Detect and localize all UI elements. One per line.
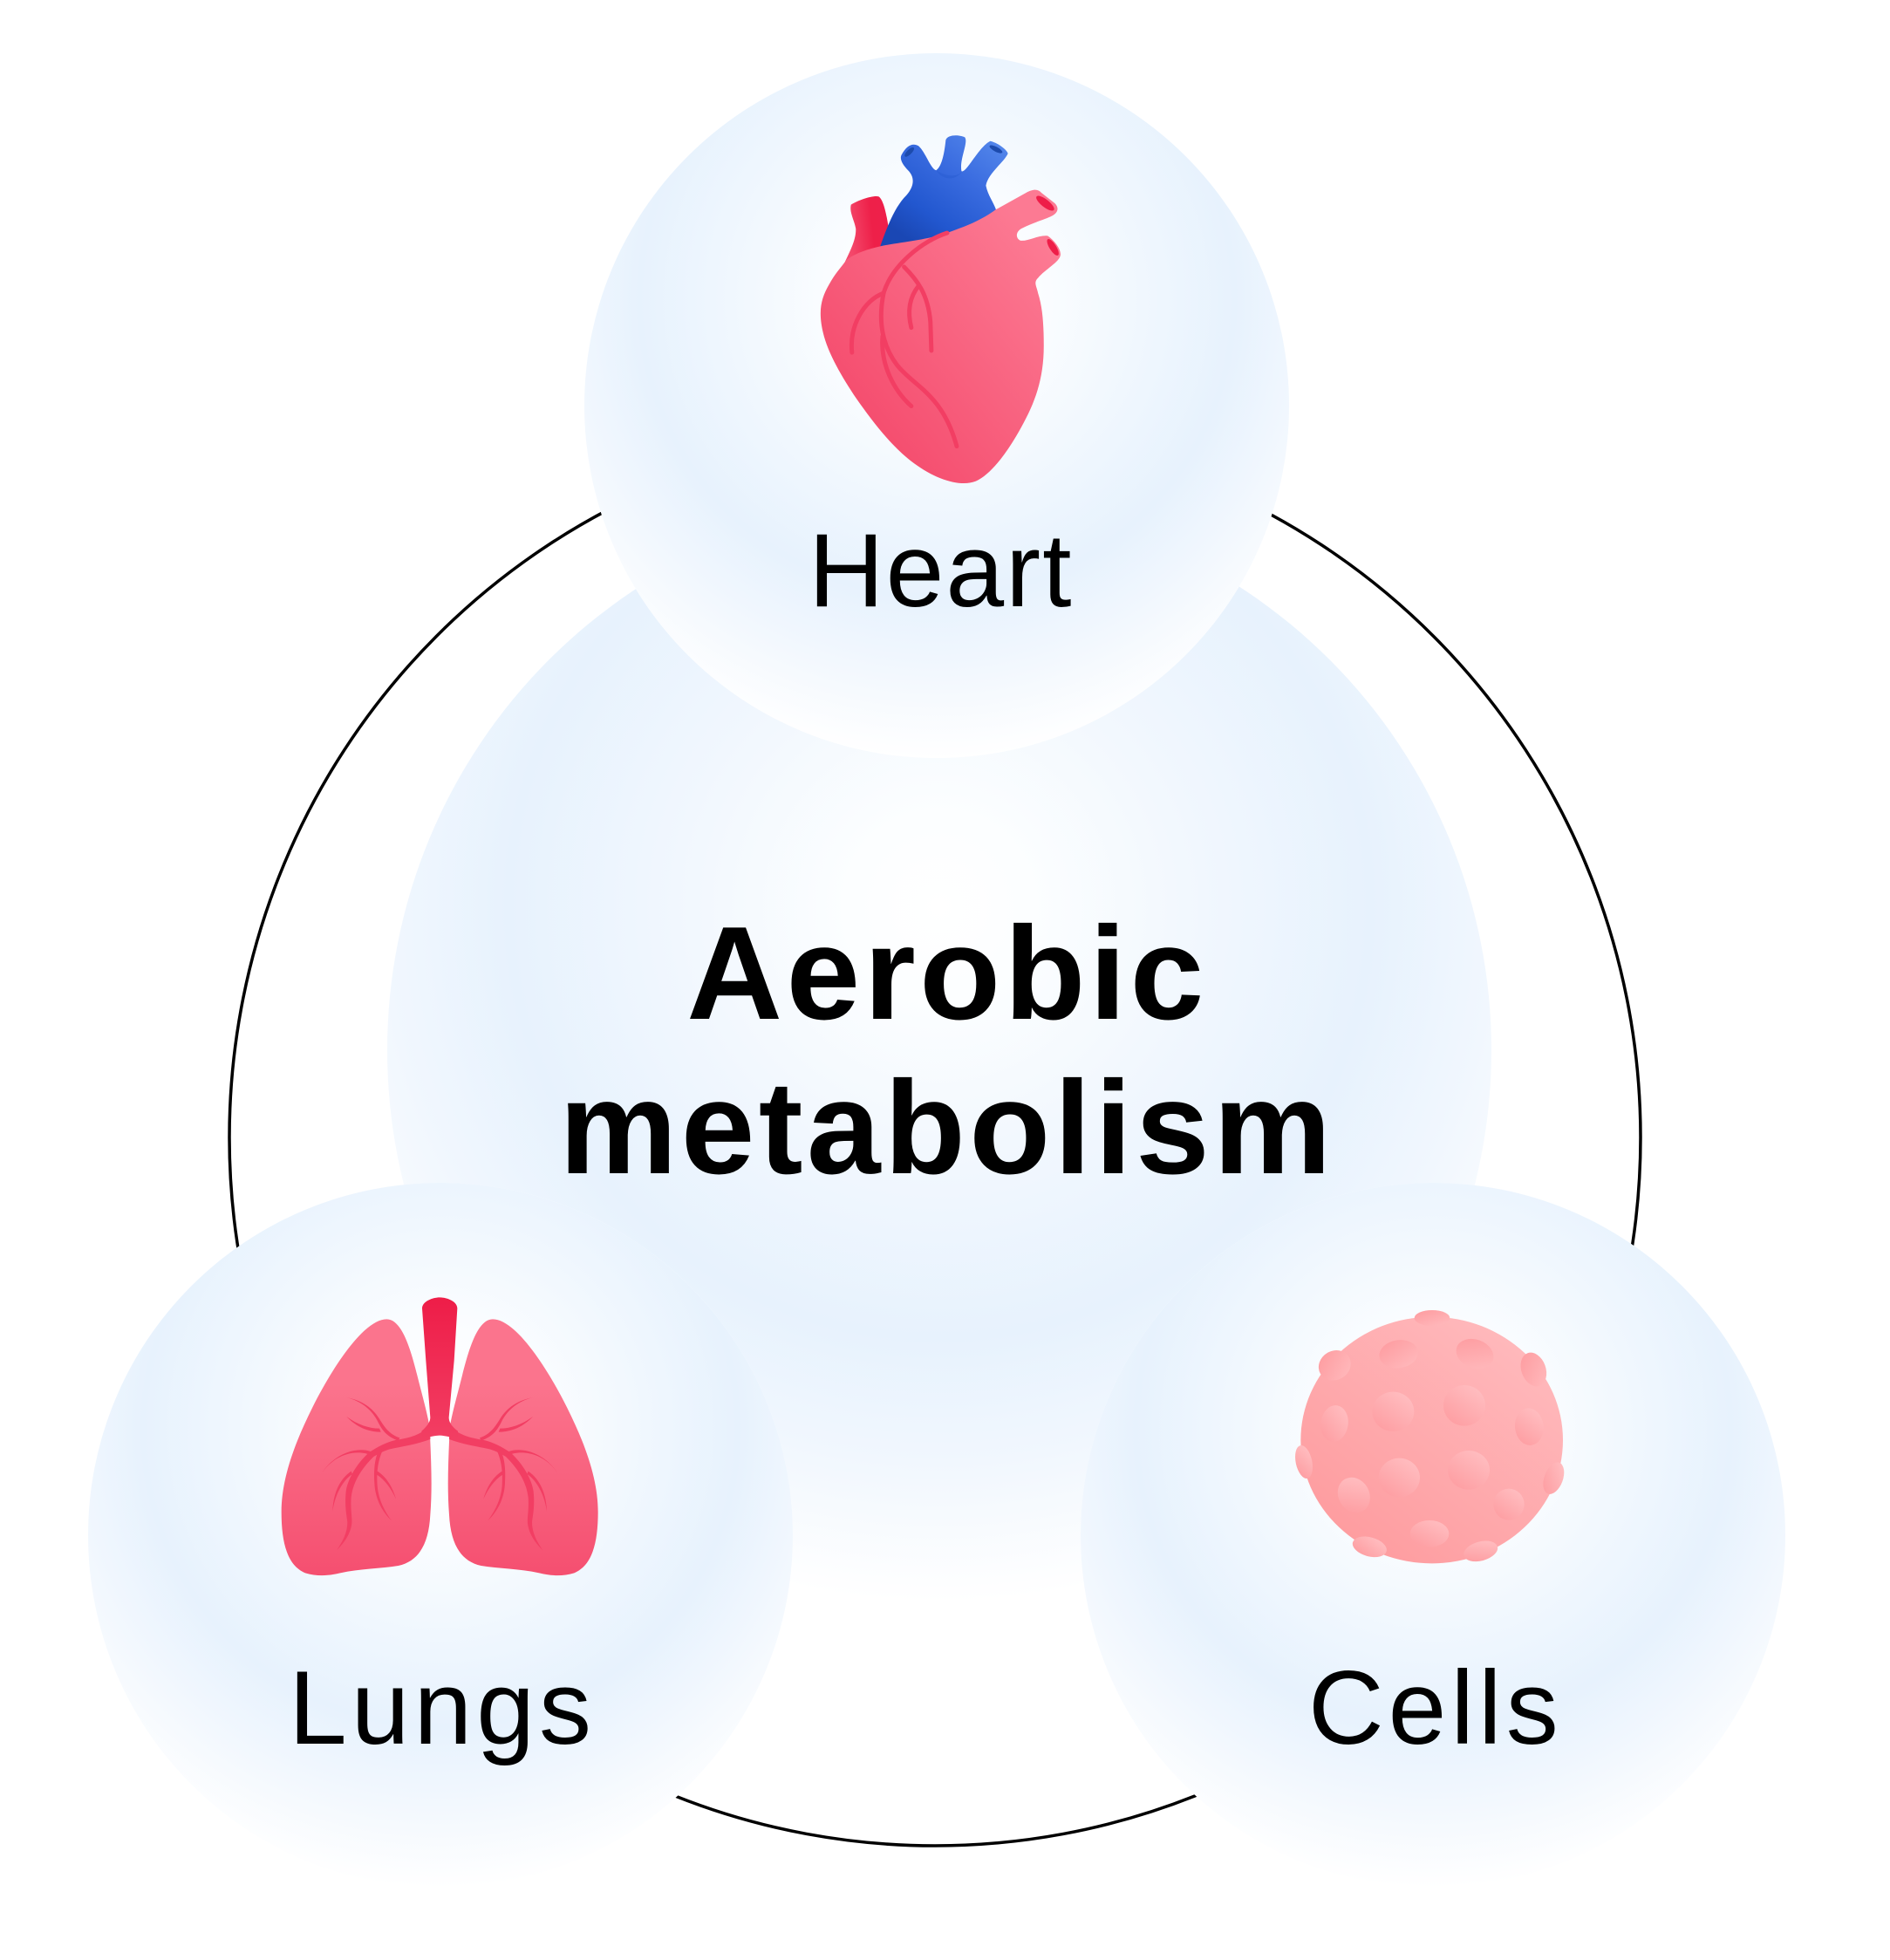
panel: heart	[584, 53, 1289, 758]
panel: lungs	[88, 1183, 793, 1888]
lung bronchi	[322, 1397, 557, 1550]
panel: cells	[1081, 1183, 1785, 1888]
icon: cell	[1293, 1310, 1568, 1565]
heart vessels	[851, 233, 957, 447]
title: Aerobic metabolism: metabolism	[559, 1054, 1335, 1202]
connecting ring	[229, 429, 1641, 1846]
icon: heart	[821, 135, 1061, 483]
trachea	[421, 1297, 458, 1439]
label: Cells: Cells	[1308, 1649, 1563, 1766]
icon: lungs	[282, 1297, 598, 1575]
label: Lungs: Lungs	[289, 1649, 596, 1766]
label: Heart: Heart	[809, 512, 1073, 629]
title: Aerobic metabolism	[559, 899, 1335, 1202]
panel: central circle	[387, 498, 1491, 1602]
title: Aerobic metabolism: Aerobic	[686, 899, 1208, 1048]
